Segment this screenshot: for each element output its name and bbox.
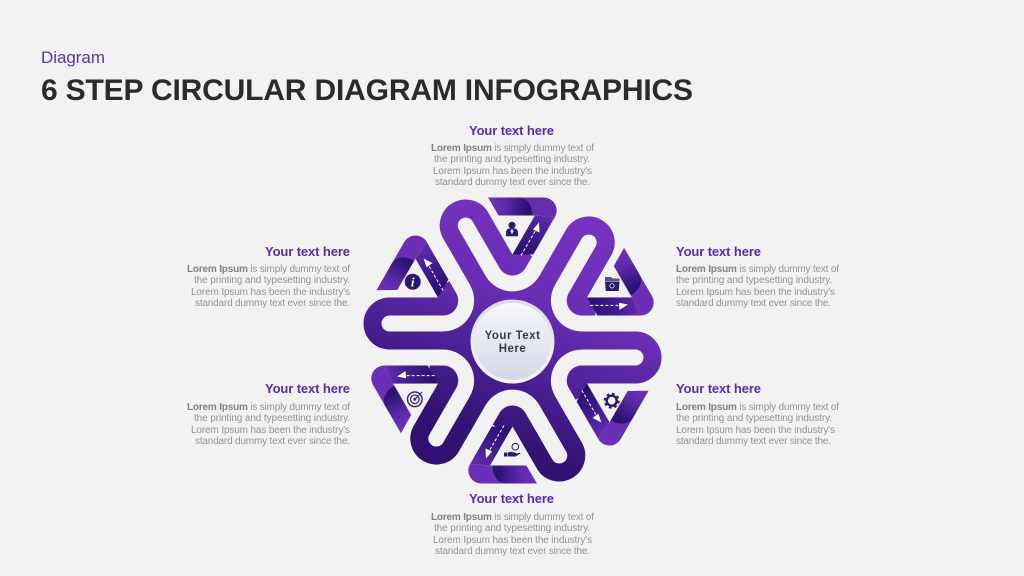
text block: bottom <box>431 491 594 557</box>
triangle: upper left step <box>376 231 461 319</box>
ribbon body <box>364 200 662 482</box>
text block: lower left <box>187 381 350 447</box>
center circle <box>470 300 554 384</box>
text block: upper left: Your text here <box>265 244 350 259</box>
subtitle: Diagram <box>41 48 105 67</box>
icon: person <box>506 222 518 236</box>
text block: lower right: standard dummy text ever since the. <box>676 436 831 447</box>
text block: bottom: Lorem Ipsum is simply dummy text of <box>431 512 594 523</box>
text block: top: standard dummy text ever since the. <box>435 177 590 188</box>
text block: upper left: Lorem Ipsum is simply dummy text of <box>187 264 350 275</box>
triangle: lower left step <box>367 345 451 433</box>
text block: bottom: the printing and typesetting industry. <box>434 523 590 534</box>
text block: upper left: standard dummy text ever since the. <box>195 298 350 309</box>
text block: lower left: the printing and typesetting industry. <box>194 413 350 424</box>
text block: top <box>431 123 594 188</box>
triangle: bottom step <box>468 426 537 484</box>
center circle: Your Text <box>485 330 540 342</box>
icon: gear <box>605 394 618 408</box>
text block: upper right: standard dummy text ever since the. <box>676 298 831 309</box>
text block: lower right: the printing and typesetting industry. <box>676 413 832 424</box>
text block: lower left: Your text here <box>265 381 350 396</box>
text block: upper left: the printing and typesetting industry. <box>194 275 350 286</box>
icon: info <box>405 274 421 290</box>
text block: lower right: Lorem Ipsum is simply dummy text of <box>676 402 839 413</box>
icon: info: i <box>411 274 415 290</box>
text block: top: the printing and typesetting industry. <box>434 154 590 165</box>
triangle: top step <box>488 197 557 256</box>
icon: folder with magnifier <box>605 277 620 291</box>
text block: lower right <box>676 381 839 447</box>
text block: lower right: Lorem Ipsum has been the industry's <box>676 425 835 436</box>
text block: upper right <box>676 244 839 309</box>
text block: top: Lorem Ipsum has been the industry's <box>433 166 592 177</box>
center circle: Here <box>499 343 526 355</box>
text block: upper right: the printing and typesetting industry. <box>676 275 832 286</box>
text block: bottom: Your text here <box>469 491 554 506</box>
title: 6 STEP CIRCULAR DIAGRAM INFOGRAPHICS <box>41 74 693 107</box>
icon: hand holding coin <box>504 443 520 456</box>
icon: target <box>408 392 422 407</box>
circular diagram <box>364 198 662 484</box>
text block: bottom: Lorem Ipsum has been the industry's <box>433 535 592 546</box>
text block: upper left: Lorem Ipsum has been the industry's <box>191 287 350 298</box>
text block: upper right: Lorem Ipsum is simply dummy text of <box>676 264 839 275</box>
triangle: lower right step <box>564 362 649 450</box>
text block: lower right: Your text here <box>676 381 761 396</box>
text block: lower left: Lorem Ipsum is simply dummy text of <box>187 402 350 413</box>
triangle: upper right step <box>574 248 658 336</box>
text block: bottom: standard dummy text ever since the. <box>435 546 590 557</box>
text block: top: Your text here <box>469 123 554 138</box>
text block: upper right: Your text here <box>676 244 761 259</box>
text block: lower left: Lorem Ipsum has been the industry's <box>191 425 350 436</box>
text block: top: Lorem Ipsum is simply dummy text of <box>431 143 594 154</box>
text block: upper left <box>187 244 350 309</box>
text block: upper right: Lorem Ipsum has been the industry's <box>676 287 835 298</box>
text block: lower left: standard dummy text ever since the. <box>195 436 350 447</box>
